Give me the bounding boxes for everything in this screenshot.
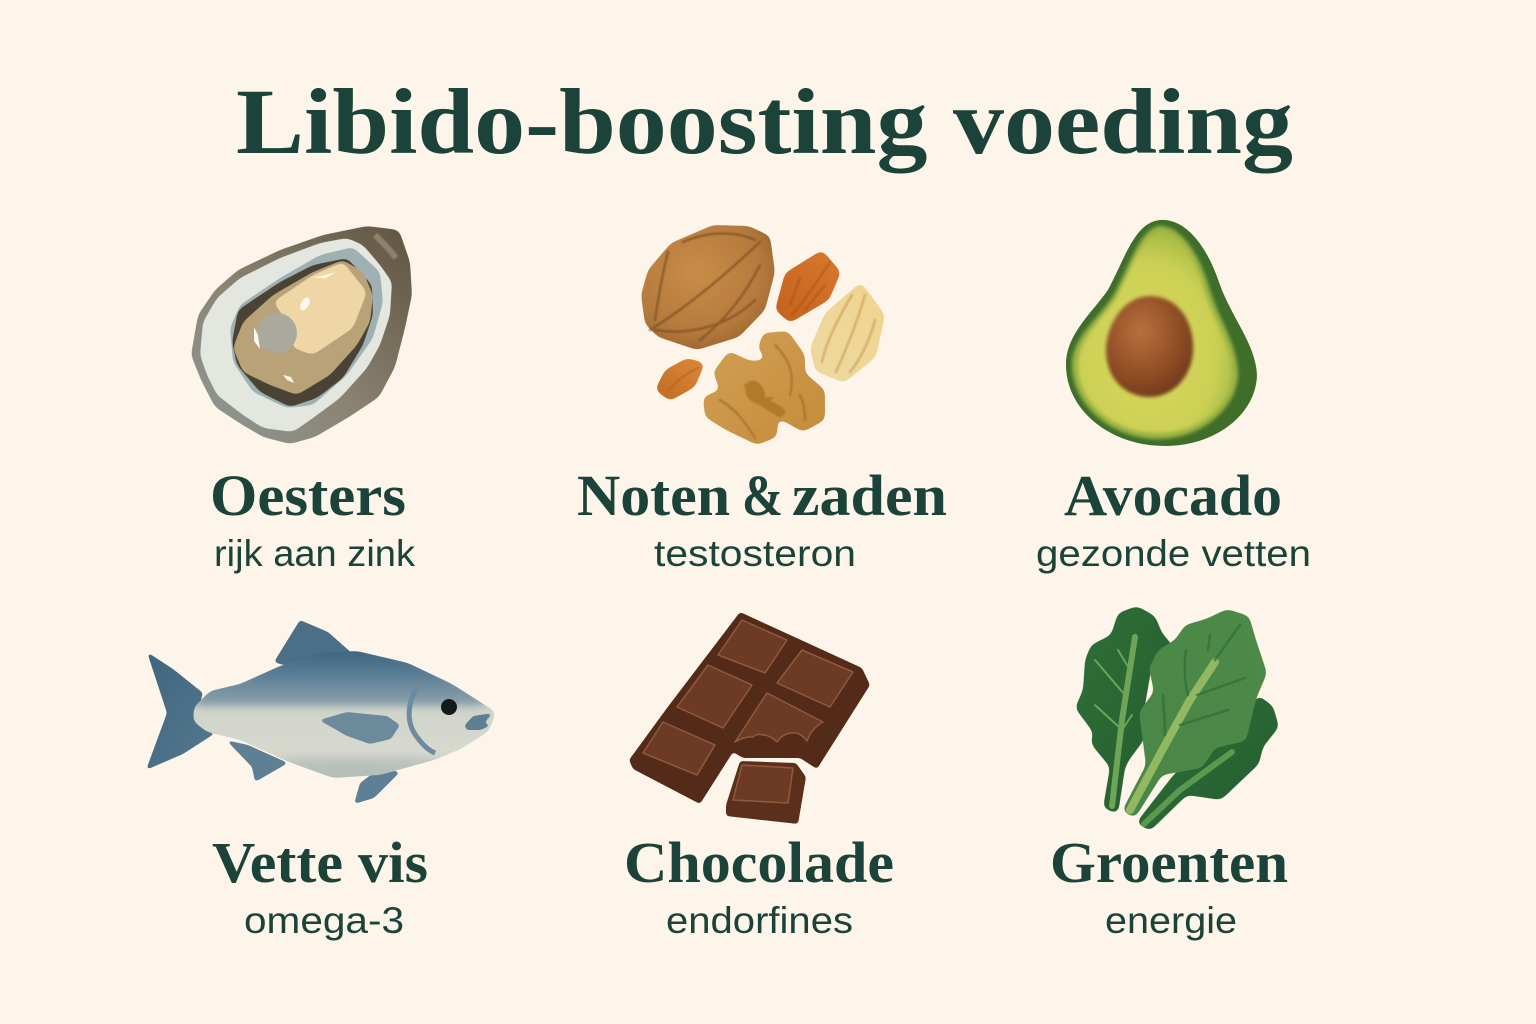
label: vette vis: Vette vis: [212, 830, 428, 895]
label: avocado: Avocado: [1064, 463, 1282, 528]
item: chocolade: [624, 612, 894, 941]
orange almond: [775, 250, 841, 323]
gill: [409, 687, 435, 753]
body: [193, 651, 496, 778]
label: groenten: Groenten: [1050, 830, 1288, 895]
pale almond: [810, 282, 885, 383]
description: gezonde vetten: gezonde vetten: [1036, 533, 1311, 574]
main leaf: [1122, 609, 1267, 818]
label: oesters: Oesters: [210, 463, 406, 528]
label: noten en zaden: [577, 463, 947, 528]
small almond: [655, 358, 705, 401]
lower fins: [226, 740, 288, 782]
item: vette vis: [146, 620, 496, 941]
description: endorfines: endorfines: [666, 900, 853, 941]
walnut half: [703, 331, 825, 445]
icon: nuts: [641, 225, 885, 445]
icon: fish: [146, 620, 496, 804]
lower right leaf: [1136, 695, 1279, 831]
title: Libido-boosting voeding: [236, 71, 1293, 174]
icon: leafy greens: [1075, 606, 1279, 831]
description: omega-3: omega-3: [244, 900, 404, 941]
description: rijk aan zink: rijk aan zink: [214, 533, 416, 574]
item: oesters: [191, 226, 416, 574]
item: noten en zaden: [577, 225, 947, 574]
label: noten en zaden: Noten: [577, 463, 730, 528]
item: avocado: [1036, 220, 1311, 574]
icon: oyster: [191, 226, 412, 444]
pectoral fin: [319, 712, 400, 744]
tail: [146, 652, 214, 770]
label: noten en zaden: zaden: [792, 463, 947, 528]
icon: avocado: [1066, 220, 1257, 446]
description: testosteron: testosteron: [654, 533, 856, 574]
chocolate piece top: [733, 765, 793, 803]
label: chocolade: Chocolade: [624, 830, 894, 895]
mouth: [464, 713, 493, 730]
item: groenten: [1050, 606, 1288, 941]
eye: [441, 699, 457, 715]
squares: [718, 620, 787, 673]
back leaf: [1075, 606, 1174, 814]
icon: chocolate bar: [629, 612, 870, 824]
label: noten en zaden: &: [742, 463, 783, 528]
walnut: [641, 225, 775, 350]
description: energie: energie: [1105, 900, 1237, 941]
dorsal fin: [274, 620, 354, 665]
